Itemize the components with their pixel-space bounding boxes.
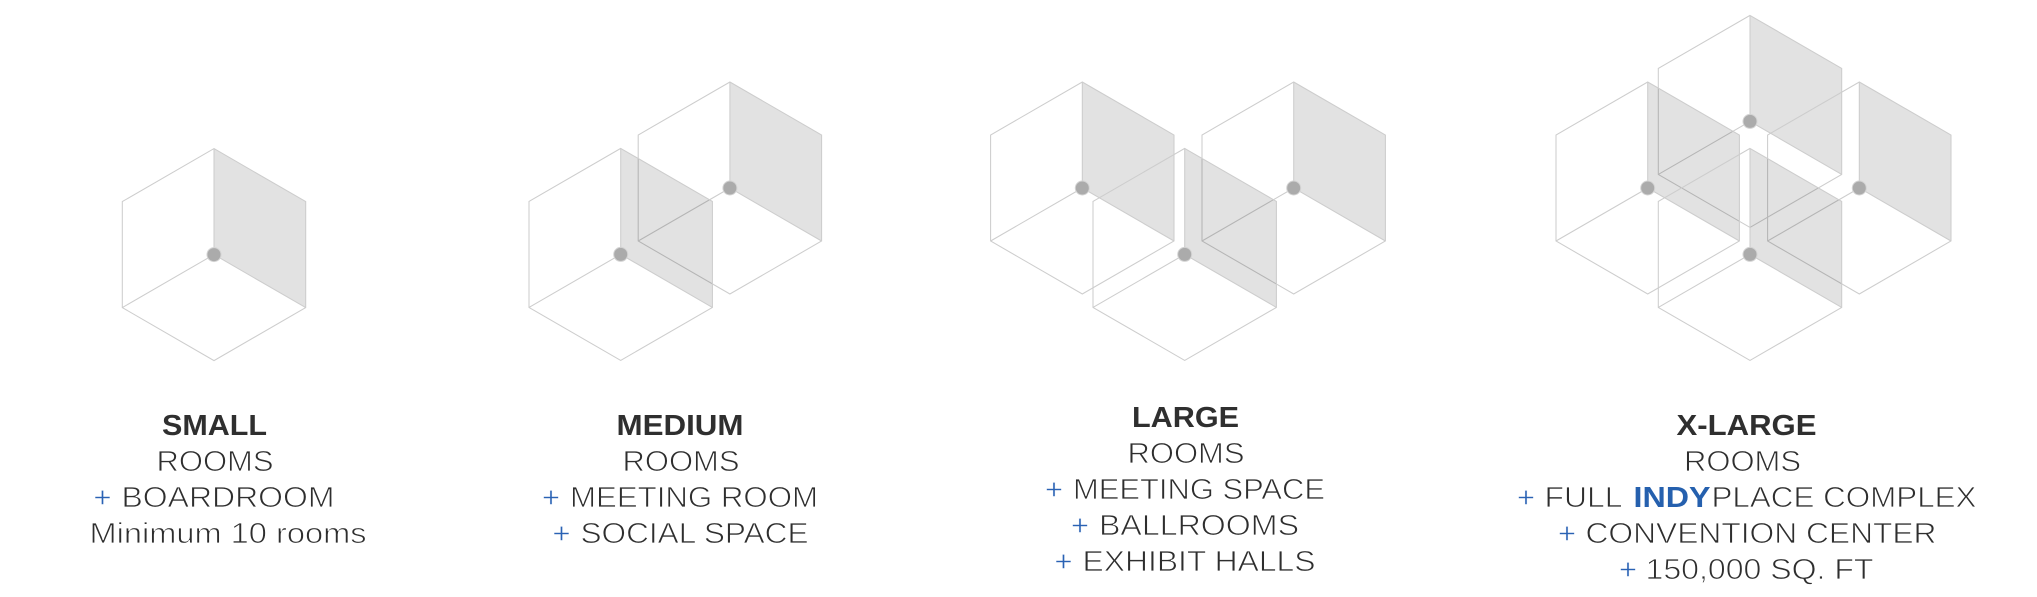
panel: small	[90, 149, 366, 550]
text: exhibit halls: +	[1054, 546, 1072, 578]
icon: medium cubes	[529, 82, 822, 360]
text: square feet: +	[1619, 554, 1637, 586]
text: convention center: +	[1558, 518, 1576, 550]
text: ballrooms: +	[1071, 510, 1089, 542]
panel: large	[991, 82, 1385, 578]
text: small boardroom: +	[94, 482, 112, 514]
text: meeting space: +	[1045, 474, 1063, 506]
text: full indyplace complex: INDY	[1634, 482, 1710, 514]
text: full indyplace complex	[1517, 482, 1976, 514]
text: full indyplace complex: FULL	[1544, 482, 1622, 514]
panel: medium	[529, 82, 822, 550]
text: ballrooms: BALLROOMS	[1099, 510, 1299, 542]
text: small boardroom: BOARDROOM	[122, 482, 334, 514]
icon: small cube	[122, 149, 306, 361]
text: large rooms: ROOMS	[1128, 438, 1244, 470]
text: social space: SOCIAL SPACE	[580, 518, 808, 550]
text: convention center: CONVENTION CENTER	[1586, 518, 1936, 550]
text: small rooms: ROOMS	[156, 446, 274, 478]
text: meeting space: MEETING SPACE	[1073, 474, 1325, 506]
panel: x-large	[1517, 15, 1976, 586]
heading: x-large: X-LARGE	[1676, 410, 1816, 442]
text: full indyplace complex: PLACE COMPLEX	[1712, 482, 1976, 514]
text: x-large rooms: ROOMS	[1684, 446, 1801, 478]
icon: large cubes	[991, 82, 1385, 360]
heading: medium: MEDIUM	[616, 410, 744, 442]
heading: large: LARGE	[1132, 402, 1239, 434]
text: medium rooms: ROOMS	[622, 446, 740, 478]
text: exhibit halls: EXHIBIT HALLS	[1082, 546, 1316, 578]
text: meeting room: MEETING ROOM	[570, 482, 818, 514]
text: meeting room: +	[542, 482, 560, 514]
text: minimum rooms: Minimum 10 rooms	[90, 518, 366, 550]
text: square feet: 150,000 SQ. FT	[1646, 554, 1874, 586]
icon: x-large cubes	[1556, 15, 1951, 360]
text: social space: +	[552, 518, 570, 550]
text: full indyplace complex: +	[1517, 482, 1535, 514]
heading: small: SMALL	[162, 410, 267, 442]
